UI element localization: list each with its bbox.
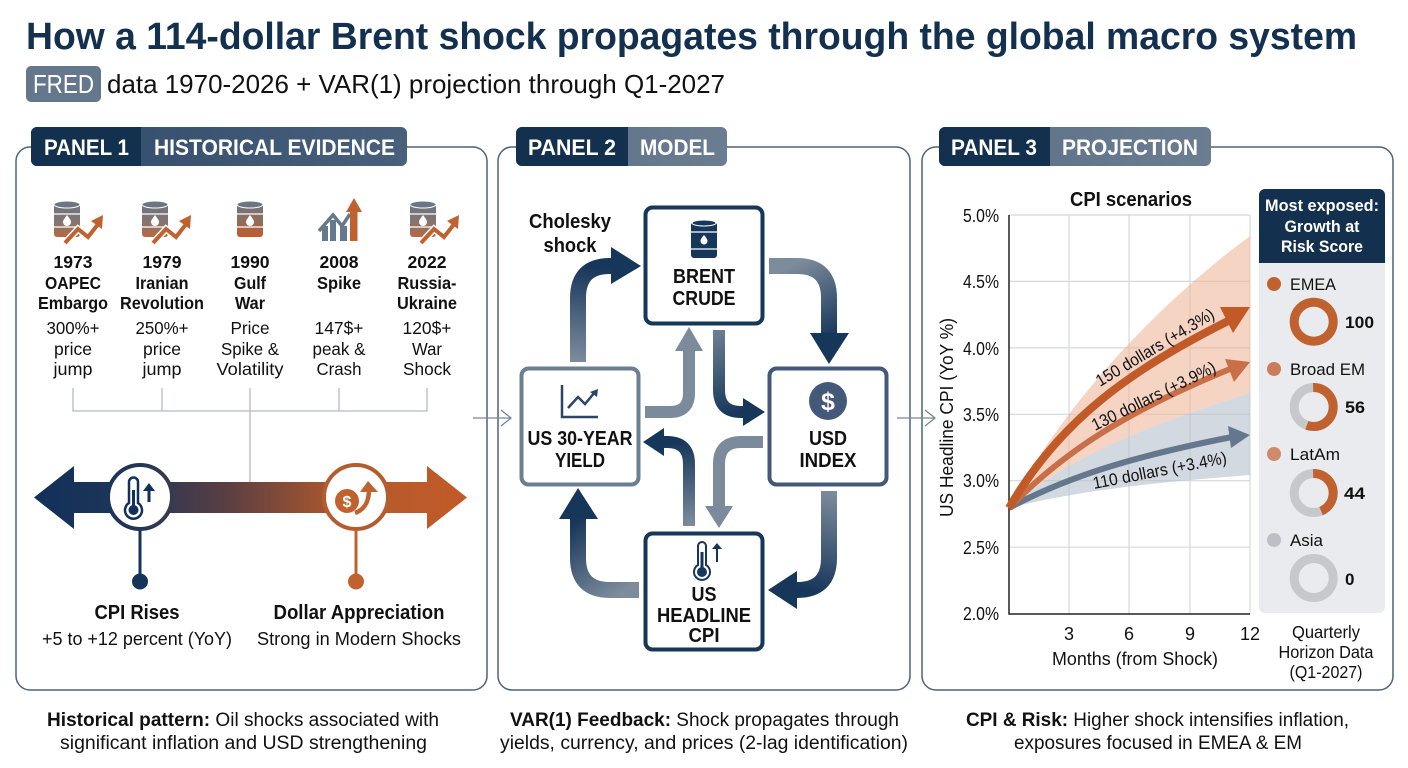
event: 1973: jump [52, 359, 92, 379]
panel 3 tab: PROJECTION [1062, 135, 1198, 160]
node: US headline CPI [646, 534, 762, 650]
y-axis ticks: 5.0% [963, 206, 999, 226]
caption: panel 3: exposures focused in EMEA & EM [1014, 733, 1302, 754]
icon: thermometer [694, 542, 722, 580]
orange uncertainty band [1009, 236, 1250, 508]
event: 1990 [216, 252, 284, 379]
event: 2008 [312, 252, 366, 379]
arrow: panel 2 to panel 3 [897, 410, 935, 426]
arrow: 130 dollars [1009, 359, 1250, 508]
icon: dollar appreciation circle [324, 465, 388, 529]
sidebar header [1259, 189, 1385, 263]
event: 1979: 250%+ [136, 318, 188, 338]
x-axis ticks: 3 [1064, 624, 1074, 644]
arrow: yield to Brent outer [578, 247, 641, 362]
node: US headline CPI: CPI [688, 625, 720, 647]
panel 2 tab: PANEL 2 [528, 135, 616, 160]
item: Broad EM: Broad EM [1290, 360, 1365, 379]
caption: panel 1: significant inflation and USD strengthening [60, 733, 427, 754]
event: 2008: Crash [316, 359, 362, 379]
arrow: CPI to yield outer [559, 488, 639, 590]
item: Broad EM [1267, 360, 1365, 426]
icon: barrel with trend 1973 [54, 201, 103, 243]
event: 1973: 1973 [54, 252, 93, 272]
event: 2022: 120$+ [402, 318, 452, 338]
node: US 30-year yield: YIELD [555, 450, 605, 472]
event: 1973: OAPEC [45, 273, 101, 293]
title: How a 114-dollar Brent shock propagates through the global macro system [26, 16, 1357, 58]
panel 2 tab: MODEL [640, 135, 715, 160]
event: 1973: Embargo [38, 293, 108, 313]
chart title: CPI scenarios [1070, 189, 1192, 211]
chart: CPI scenarios [937, 189, 1260, 669]
event: 1990: Spike & [221, 339, 279, 359]
node: Brent crude: CRUDE [672, 287, 736, 310]
node: US headline CPI: HEADLINE [657, 605, 751, 627]
label: CPI rises: +5 to +12 percent (YoY) [42, 629, 232, 649]
event: 1973 [38, 252, 108, 379]
event: 2022: Ukraine [397, 293, 457, 313]
x-axis title: Months (from Shock) [1052, 649, 1218, 669]
caption: panel 3 [966, 710, 1349, 754]
subtitle [26, 66, 725, 102]
item: Asia [1267, 531, 1354, 598]
item: LatAm: LatAm [1290, 445, 1340, 464]
sidebar header: Risk Score [1281, 237, 1363, 256]
event: 2008: 147$+ [314, 318, 364, 338]
caption: panel 1 [47, 710, 439, 754]
label: CPI rises: CPI Rises [94, 601, 180, 624]
caption: panel 2: yields, currency, and prices (2-lag identification) [500, 733, 908, 754]
item: Asia: 0 [1345, 570, 1354, 589]
sidebar: growth at risk [1259, 189, 1385, 613]
event: 2022: Shock [403, 359, 451, 379]
panel: model [498, 127, 910, 690]
sidebar header: Growth at [1284, 217, 1360, 236]
item: LatAm: 44 [1344, 484, 1366, 503]
event bracket [73, 388, 427, 482]
event: 2008: 2008 [320, 252, 359, 272]
arrow: Brent to USD outer [769, 266, 849, 364]
event: 2022: 2022 [408, 252, 447, 272]
event: 1973: 300%+ [46, 318, 100, 338]
event: 1990: 1990 [230, 252, 270, 272]
Cholesky shock label: shock [544, 235, 597, 257]
panel 2 tab [516, 127, 727, 166]
FRED badge: FRED [33, 69, 94, 99]
arrow: Brent to USD inner [719, 330, 765, 426]
item: EMEA [1267, 275, 1374, 341]
x-axis ticks: 6 [1124, 624, 1134, 644]
item: Asia: Asia [1290, 531, 1324, 550]
arrow: CPI to yield inner [643, 428, 689, 526]
event: 1979: Revolution [120, 293, 204, 313]
caption: panel 2 [500, 710, 908, 754]
y-axis ticks: 2.5% [963, 538, 999, 558]
node: Brent crude: BRENT [673, 265, 735, 288]
arrow: 150 dollars [1009, 307, 1250, 508]
event: 1979: 1979 [142, 252, 182, 272]
event: 2022: Russia- [398, 273, 457, 293]
icon: barrel with trend 1979 [142, 201, 191, 243]
arrow: USD to CPI inner [705, 442, 763, 528]
label: 110 dollars: 110 dollars (+3.4%) [1091, 448, 1228, 493]
node: Brent crude [646, 208, 762, 324]
event: 2008: Spike [317, 273, 361, 293]
Cholesky shock label: Cholesky [529, 211, 612, 233]
arrow: panel 1 to panel 2 [473, 410, 511, 426]
caption: panel 3: CPI & Risk: Higher shock intensifies inflation, [966, 710, 1349, 731]
panel 3 tab [939, 127, 1211, 166]
node: USD index: USD [809, 428, 847, 450]
node: US 30-year yield: US 30-YEAR [528, 428, 633, 450]
item: LatAm [1267, 445, 1366, 512]
item: EMEA: EMEA [1290, 275, 1337, 294]
label: dollar appreciation [257, 601, 461, 649]
y-axis title: US Headline CPI (YoY %) [937, 318, 957, 517]
event: 1990: Price [230, 318, 270, 338]
item: EMEA: 100 [1345, 313, 1374, 332]
double-headed gradient arrow [34, 466, 467, 529]
y-axis ticks: 4.5% [963, 272, 999, 292]
icon: barrel with trend 2022 [410, 201, 459, 243]
caption: panel 2: VAR(1) Feedback: Shock propagates through [510, 710, 899, 731]
event: 1990: Volatility [216, 359, 284, 379]
label: dollar appreciation: Strong in Modern Shocks [257, 629, 461, 649]
event: 2008: peak & [312, 339, 366, 359]
item: Broad EM: 56 [1345, 398, 1365, 417]
panel 1 tab [31, 127, 407, 166]
event: 1979: price [143, 339, 181, 359]
panel 3 tab: PANEL 3 [951, 135, 1037, 160]
arrow: yield to Brent inner [645, 327, 703, 412]
grey uncertainty band [1009, 393, 1250, 508]
x-axis ticks: 12 [1240, 624, 1260, 644]
event: 1979: jump [141, 359, 182, 379]
label: CPI rises [42, 601, 232, 649]
event: 2022: War [412, 339, 442, 359]
node: US headline CPI: US [692, 584, 716, 606]
icon: line chart [562, 385, 598, 417]
icon: barrel [691, 220, 717, 258]
sidebar footnote: (Q1-2027) [1290, 662, 1362, 682]
y-axis ticks: 2.0% [963, 604, 999, 624]
label: 150 dollars: 150 dollars (+4.3%) [1092, 305, 1218, 390]
sidebar header: Most exposed: [1265, 196, 1379, 215]
y-axis ticks: 3.5% [963, 405, 999, 425]
node: US 30-year yield [522, 368, 638, 484]
y-axis ticks [963, 206, 999, 624]
axes [1009, 215, 1250, 614]
event: 1973: price [54, 339, 92, 359]
stem: CPI [132, 530, 148, 590]
arrow: 110 dollars [1009, 426, 1250, 508]
event: 1990: Gulf [234, 273, 266, 293]
node: USD index: INDEX [800, 450, 857, 472]
icon: dollar: $ [821, 388, 835, 416]
y-axis ticks: 4.0% [963, 339, 999, 359]
event: 1990: War [235, 293, 265, 313]
icon: barrel 1990 [237, 201, 263, 237]
panel 1 tab: HISTORICAL EVIDENCE [154, 135, 395, 160]
icon: dollar appreciation circle: $ [343, 494, 352, 511]
Cholesky shock label [529, 211, 612, 257]
panel: projection [922, 127, 1393, 690]
arrow: USD to CPI outer [768, 491, 829, 609]
sidebar footnote: Horizon Data [1278, 642, 1374, 662]
icon: chart spike 2008 [319, 198, 362, 241]
stem: dollar [348, 530, 364, 590]
sidebar footnote: Quarterly [1292, 622, 1360, 642]
y-axis ticks: 3.0% [963, 471, 999, 491]
event: 2022 [397, 252, 457, 379]
x-axis ticks [1064, 624, 1260, 644]
node: USD index [770, 368, 886, 484]
event: 1979: Iranian [136, 273, 188, 293]
x-axis ticks: 9 [1185, 624, 1195, 644]
event: 1979 [120, 252, 204, 379]
icon: thermometer circle [108, 465, 172, 529]
subtitle text: data 1970-2026 + VAR(1) projection through Q1-2027 [107, 69, 725, 99]
label: dollar appreciation: Dollar Appreciation [274, 601, 444, 624]
caption: panel 1: Historical pattern: Oil shocks associated with [47, 710, 439, 731]
panel: historical evidence [16, 127, 487, 690]
label: 130 dollars: 130 dollars (+3.9%) [1088, 358, 1219, 435]
panel 1 tab: PANEL 1 [44, 135, 129, 160]
sidebar footnote [1278, 622, 1374, 682]
